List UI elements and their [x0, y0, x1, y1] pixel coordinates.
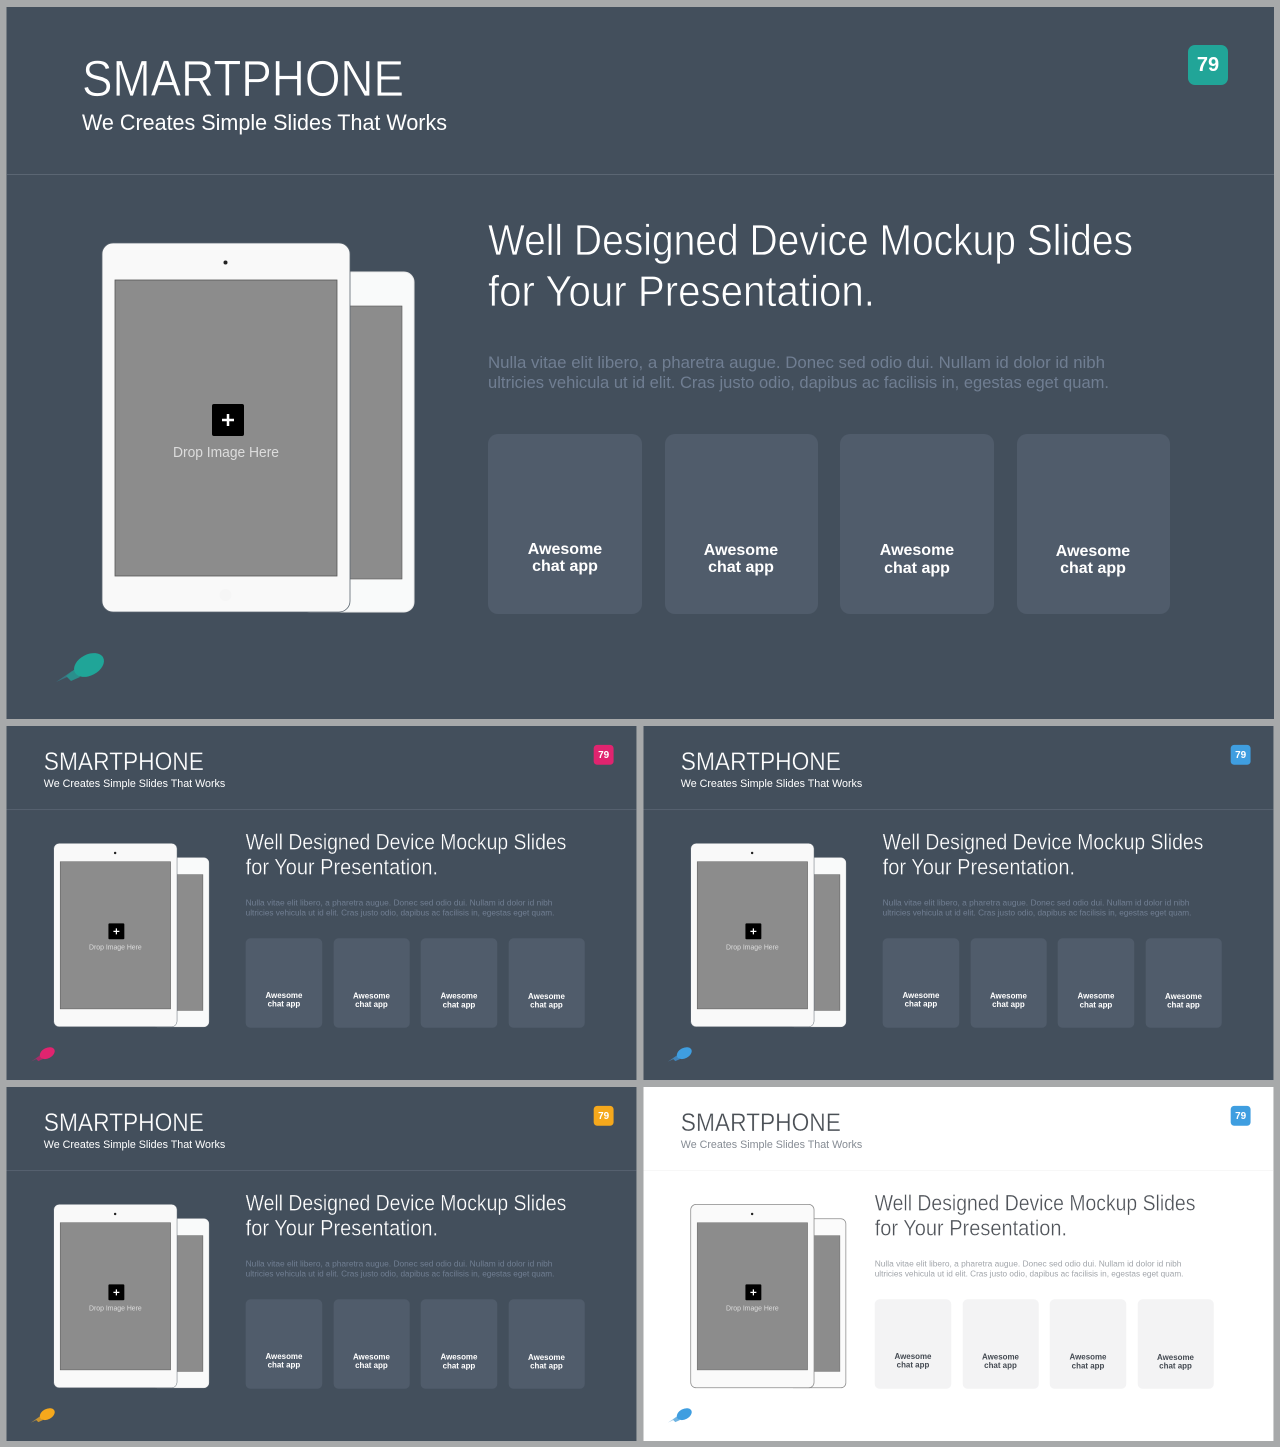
page badge: 79 — [598, 750, 610, 761]
panel: large teal slide — [6, 7, 1274, 719]
body text: ultricies vehicula ut id elit. Cras justo odio, dapibus ac facilisis in, egestas eget quam. — [883, 907, 1191, 917]
feature cards: chat app — [1159, 1361, 1192, 1370]
feature cards: Awesome — [990, 991, 1027, 1000]
panel: orange slide — [6, 1087, 636, 1441]
feature cards: chat app — [443, 1361, 475, 1370]
title: SMARTPHONE — [44, 1109, 204, 1137]
headline: for Your Presentation. — [883, 855, 1075, 880]
panel: blue slide — [644, 726, 1273, 1080]
feature cards — [488, 434, 1170, 614]
page badge: 79 — [1235, 1111, 1247, 1122]
title: SMARTPHONE — [82, 50, 404, 107]
panel: white slide — [644, 1087, 1273, 1441]
page badge: 79 — [1197, 54, 1219, 76]
feature cards: chat app — [268, 999, 300, 1008]
feature cards: Awesome — [353, 1352, 390, 1361]
body text: ultricies vehicula ut id elit. Cras justo odio, dapibus ac facilisis in, egestas eget quam. — [246, 907, 554, 917]
feature cards: chat app — [708, 559, 774, 576]
page badge — [1231, 1106, 1251, 1126]
body text: Nulla vitae elit libero, a pharetra augue. Donec sed odio dui. Nullam id dolor id nibh — [246, 897, 553, 907]
page badge: 79 — [1235, 750, 1247, 761]
headline: for Your Presentation. — [488, 267, 875, 316]
headline — [488, 216, 1133, 316]
headline: Well Designed Device Mockup Slides — [488, 216, 1133, 265]
feature cards: chat app — [992, 1000, 1025, 1009]
body text: ultricies vehicula ut id elit. Cras justo odio, dapibus ac facilisis in, egestas eget quam. — [246, 1268, 554, 1278]
tablet mockup — [102, 243, 414, 612]
feature cards: Awesome — [440, 991, 478, 1000]
headline: Well Designed Device Mockup Slides — [875, 1190, 1195, 1215]
feature cards: Awesome — [982, 1352, 1020, 1361]
title: SMARTPHONE — [681, 748, 841, 776]
rocket icon — [31, 1045, 57, 1062]
feature cards: chat app — [905, 999, 937, 1008]
subtitle: We Creates Simple Slides That Works — [44, 1139, 226, 1151]
rocket icon — [668, 1045, 694, 1062]
headline — [883, 829, 1203, 880]
feature cards — [246, 938, 585, 1028]
feature cards: Awesome — [528, 1353, 565, 1362]
headline: Well Designed Device Mockup Slides — [246, 1190, 566, 1215]
headline: for Your Presentation. — [246, 855, 438, 880]
page badge — [594, 1106, 614, 1126]
headline — [875, 1190, 1195, 1241]
page badge — [594, 745, 614, 765]
rocket icon — [56, 648, 108, 682]
headline — [246, 829, 566, 880]
body text — [875, 1258, 1183, 1278]
headline: Well Designed Device Mockup Slides — [883, 829, 1203, 854]
feature cards: chat app — [268, 1360, 300, 1369]
feature cards: Awesome — [902, 991, 940, 1000]
body text — [488, 353, 1109, 392]
subtitle: We Creates Simple Slides That Works — [681, 1139, 863, 1151]
tablet mockup: Drop Image Here — [89, 943, 142, 952]
feature cards: chat app — [530, 1361, 563, 1370]
tablet mockup: Drop Image Here — [726, 1304, 779, 1313]
tablet mockup — [691, 1204, 846, 1388]
rocket icon — [668, 1406, 694, 1423]
feature cards: chat app — [897, 1360, 929, 1369]
body text: Nulla vitae elit libero, a pharetra augue. Donec sed odio dui. Nullam id dolor id nibh — [875, 1258, 1182, 1268]
body text: Nulla vitae elit libero, a pharetra augue. Donec sed odio dui. Nullam id dolor id nibh — [246, 1258, 553, 1268]
feature cards — [875, 1299, 1214, 1389]
feature cards: Awesome — [528, 541, 602, 558]
body text: ultricies vehicula ut id elit. Cras justo odio, dapibus ac facilisis in, egestas eget quam. — [488, 373, 1109, 392]
feature cards — [246, 1299, 585, 1389]
subtitle: We Creates Simple Slides That Works — [44, 778, 226, 790]
page badge: 79 — [598, 1111, 610, 1122]
body text: Nulla vitae elit libero, a pharetra augue. Donec sed odio dui. Nullam id dolor id nibh — [488, 353, 1105, 372]
title: SMARTPHONE — [681, 1109, 841, 1137]
tablet mockup: Drop Image Here — [89, 1304, 142, 1313]
feature cards: chat app — [443, 1000, 475, 1009]
feature cards: chat app — [355, 1000, 388, 1009]
rocket icon — [31, 1406, 57, 1423]
feature cards: Awesome — [265, 1352, 303, 1361]
tablet mockup: Drop Image Here — [726, 943, 779, 952]
headline: Well Designed Device Mockup Slides — [246, 829, 566, 854]
panel: pink slide — [6, 726, 636, 1080]
feature cards: chat app — [1060, 560, 1126, 577]
feature cards: Awesome — [704, 542, 778, 559]
feature cards: Awesome — [1056, 543, 1130, 560]
body text: ultricies vehicula ut id elit. Cras justo odio, dapibus ac facilisis in, egestas eget quam. — [875, 1268, 1183, 1278]
feature cards: chat app — [884, 560, 950, 577]
feature cards: Awesome — [528, 992, 565, 1001]
feature cards: Awesome — [1165, 992, 1202, 1001]
body text — [246, 897, 554, 917]
subtitle: We Creates Simple Slides That Works — [82, 110, 447, 135]
feature cards: chat app — [532, 558, 598, 575]
feature cards: chat app — [530, 1000, 563, 1009]
body text — [883, 897, 1191, 917]
feature cards: Awesome — [880, 542, 954, 559]
tablet mockup: Drop Image Here — [173, 444, 279, 461]
body text: Nulla vitae elit libero, a pharetra augue. Donec sed odio dui. Nullam id dolor id nibh — [883, 897, 1190, 907]
headline — [246, 1190, 566, 1241]
feature cards: chat app — [1080, 1000, 1112, 1009]
body text — [246, 1258, 554, 1278]
feature cards — [883, 938, 1222, 1028]
feature cards: Awesome — [895, 1352, 932, 1361]
title: SMARTPHONE — [44, 748, 204, 776]
page badge — [1231, 745, 1251, 765]
feature cards: Awesome — [1070, 1352, 1107, 1361]
page badge — [1188, 45, 1228, 85]
subtitle: We Creates Simple Slides That Works — [681, 778, 863, 790]
feature cards: Awesome — [353, 991, 390, 1000]
feature cards: chat app — [1072, 1361, 1104, 1370]
feature cards: Awesome — [1077, 991, 1115, 1000]
headline: for Your Presentation. — [246, 1216, 438, 1241]
feature cards: chat app — [355, 1361, 388, 1370]
tablet mockup — [54, 1204, 209, 1388]
headline: for Your Presentation. — [875, 1216, 1067, 1241]
feature cards: chat app — [1167, 1000, 1200, 1009]
tablet mockup — [691, 843, 846, 1027]
feature cards: Awesome — [265, 991, 303, 1000]
feature cards: Awesome — [1157, 1353, 1195, 1362]
tablet mockup — [54, 843, 209, 1027]
feature cards: chat app — [984, 1361, 1017, 1370]
feature cards: Awesome — [440, 1352, 478, 1361]
